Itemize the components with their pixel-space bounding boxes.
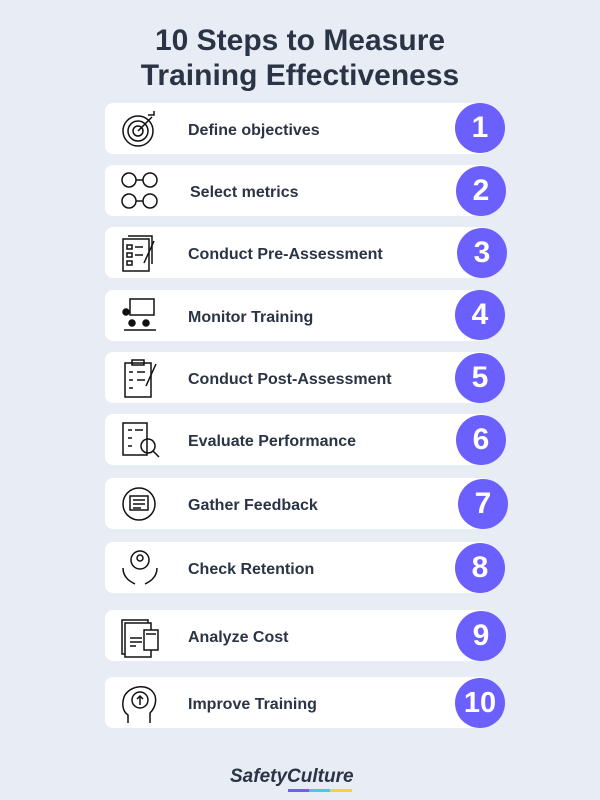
number 6: 6: [473, 423, 489, 456]
title: [141, 24, 459, 92]
row 5: [105, 352, 490, 403]
row 2: [105, 165, 490, 216]
number 1: [455, 103, 505, 153]
number 9: [456, 611, 506, 661]
number 3: 3: [474, 236, 490, 269]
number 10: 10: [464, 687, 496, 719]
number 8: 8: [472, 551, 488, 584]
number 5: [455, 353, 505, 403]
number 10: [455, 678, 505, 728]
number 3: [457, 228, 507, 278]
number 4: [455, 290, 505, 340]
number 2: [456, 166, 506, 216]
row 3: Conduct Pre-Assessment: [188, 246, 383, 263]
number 4: 4: [472, 298, 488, 331]
row 10: Improve Training: [188, 696, 317, 713]
row 1: [105, 103, 490, 154]
row 10: [105, 677, 490, 728]
title: Training Effectiveness: [141, 59, 459, 92]
number 8: [455, 543, 505, 593]
number 2: 2: [473, 174, 489, 207]
row 3: [105, 227, 490, 278]
row 9: [105, 610, 490, 661]
row 5: Conduct Post-Assessment: [188, 371, 392, 388]
row 6: Evaluate Performance: [188, 433, 356, 450]
row 7: [105, 478, 490, 529]
row 6: [105, 414, 490, 465]
row 1: Define objectives: [188, 122, 320, 139]
row 4: [105, 290, 490, 341]
logo: SafetyCulture: [230, 766, 354, 787]
number 5: 5: [472, 361, 488, 394]
number 9: 9: [473, 619, 489, 652]
number 6: [456, 415, 506, 465]
number 7: [458, 479, 508, 529]
row 8: [105, 542, 490, 593]
row 7: Gather Feedback: [188, 497, 318, 514]
row 9: Analyze Cost: [188, 629, 288, 646]
row 2: Select metrics: [190, 184, 299, 201]
number 7: 7: [475, 487, 491, 520]
row 4: Monitor Training: [188, 309, 313, 326]
number 1: 1: [472, 111, 488, 144]
row 8: Check Retention: [188, 561, 314, 578]
title: 10 Steps to Measure: [155, 24, 445, 57]
